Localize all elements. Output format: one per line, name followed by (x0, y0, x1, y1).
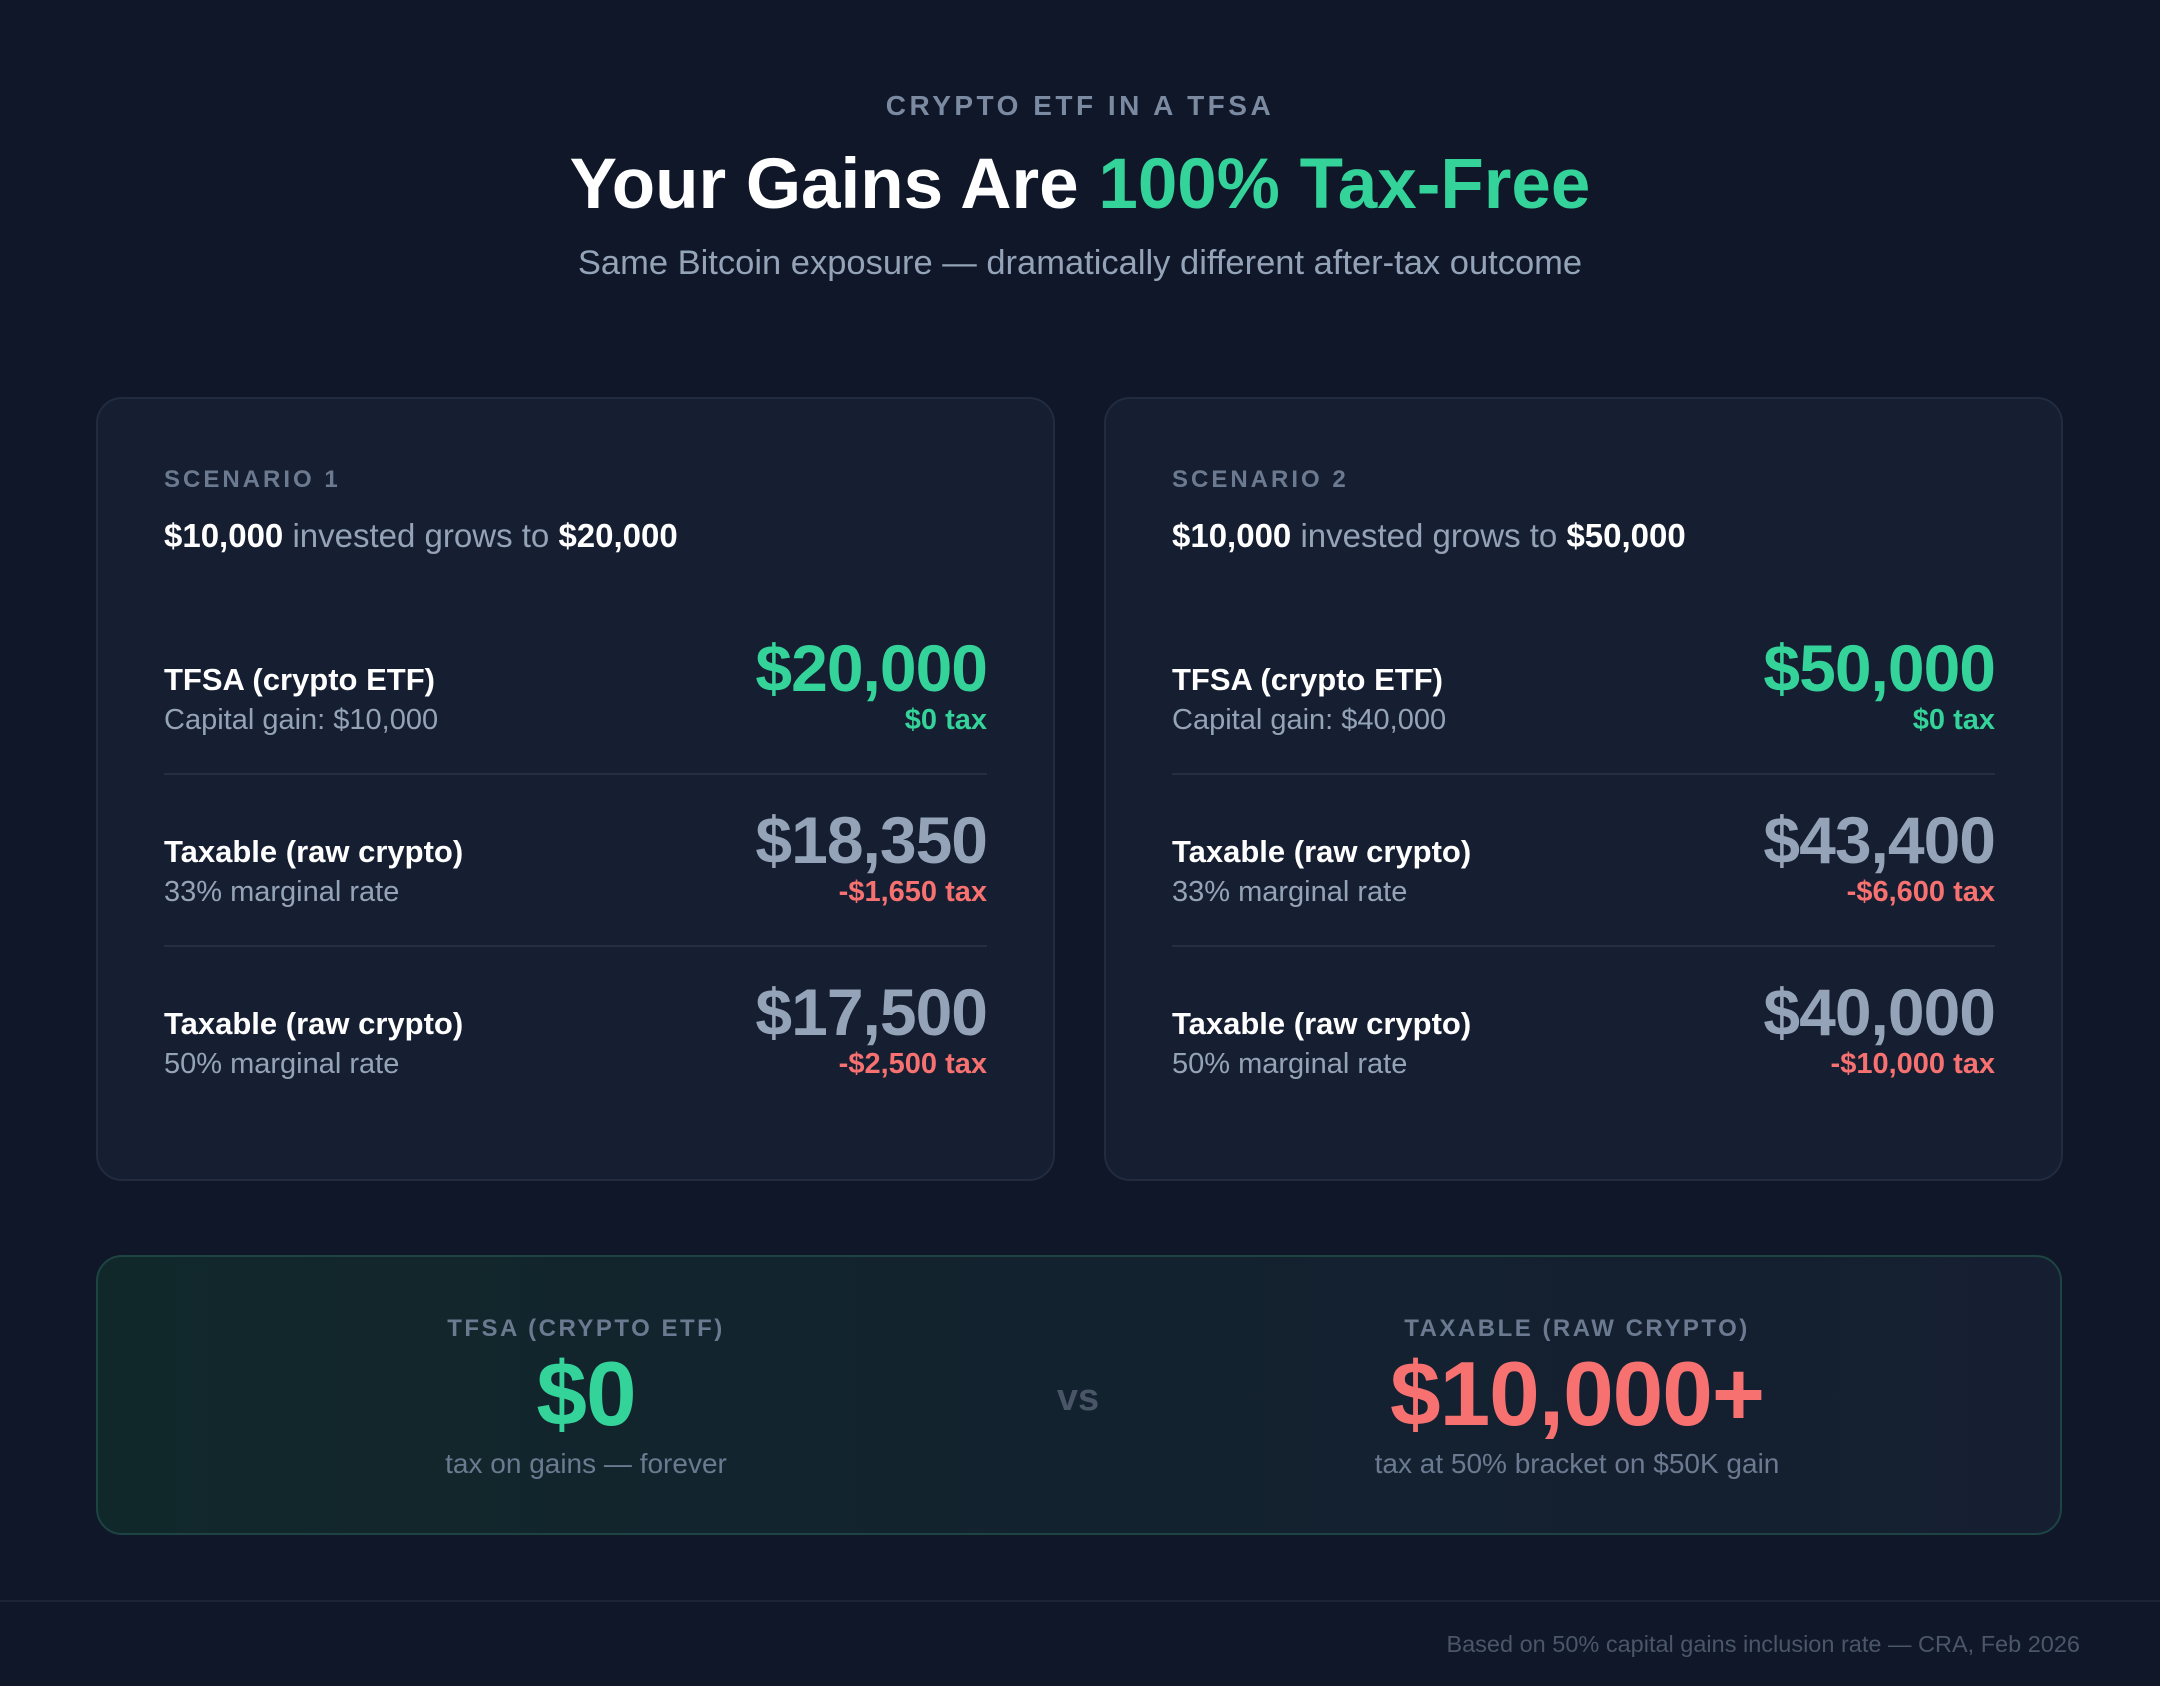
row: taxable 33%: 33% marginal rate (1172, 876, 1407, 908)
kicker: CRYPTO ETF IN A TFSA (886, 90, 1274, 121)
row: TFSA: $20,000 (755, 631, 987, 705)
row: taxable 33% (1172, 803, 1995, 908)
row: taxable 50%: -$2,500 tax (839, 1048, 987, 1080)
row: TFSA: TFSA (crypto ETF) (1172, 662, 1443, 697)
row: taxable 33%: $18,350 (755, 803, 987, 877)
row: taxable 50%: Taxable (raw crypto) (1172, 1006, 1471, 1041)
summary: taxable: tax at 50% bracket on $50K gain (1375, 1448, 1779, 1479)
panel: scenario 2 (1104, 397, 2063, 1181)
scenario description: $10,000 invested grows to $50,000 (1172, 517, 1686, 554)
row: taxable 50%: Taxable (raw crypto) (164, 1006, 463, 1041)
row: taxable 50%: $17,500 (755, 975, 987, 1049)
summary: taxable: $10,000+ (1390, 1344, 1764, 1445)
row: TFSA: $0 tax (905, 704, 987, 736)
scenario label: SCENARIO 2 (1172, 466, 1349, 493)
subtitle: Same Bitcoin exposure — dramatically different after-tax outcome (578, 244, 1582, 282)
summary: TFSA (445, 1315, 727, 1479)
panel: scenario 1 (96, 397, 1055, 1181)
vs label: vs (1057, 1377, 1099, 1419)
summary: taxable (1375, 1315, 1779, 1479)
scenario description: $10,000 invested grows to $20,000 (164, 517, 678, 554)
row: taxable 33%: Taxable (raw crypto) (164, 834, 463, 869)
row: taxable 33%: -$6,600 tax (1847, 876, 1995, 908)
row: TFSA (1172, 631, 1995, 736)
summary: TFSA: $0 (536, 1344, 636, 1445)
row: TFSA: $0 tax (1913, 704, 1995, 736)
summary: TFSA: TFSA (CRYPTO ETF) (447, 1315, 725, 1342)
panel: summary comparison (96, 1255, 2062, 1535)
row: TFSA: Capital gain: $10,000 (164, 704, 438, 736)
scenario label: SCENARIO 1 (164, 466, 341, 493)
row: TFSA (164, 631, 987, 736)
row: TFSA: Capital gain: $40,000 (1172, 704, 1446, 736)
row: taxable 33% (164, 803, 987, 908)
row: taxable 50% (1172, 975, 1995, 1080)
row: taxable 33%: Taxable (raw crypto) (1172, 834, 1471, 869)
row: taxable 33%: -$1,650 tax (839, 876, 987, 908)
summary: taxable: TAXABLE (RAW CRYPTO) (1404, 1315, 1750, 1342)
row: taxable 50%: 50% marginal rate (164, 1048, 399, 1080)
row: taxable 50%: $40,000 (1763, 975, 1995, 1049)
footer note: Based on 50% capital gains inclusion rate — CRA, Feb 2026 (1446, 1631, 2080, 1657)
row: TFSA: $50,000 (1763, 631, 1995, 705)
title: Your Gains Are 100% Tax-Free (570, 145, 1590, 224)
row: taxable 50%: -$10,000 tax (1831, 1048, 1995, 1080)
summary: TFSA: tax on gains — forever (445, 1448, 727, 1479)
row: taxable 33%: 33% marginal rate (164, 876, 399, 908)
row: taxable 50% (164, 975, 987, 1080)
row: TFSA: TFSA (crypto ETF) (164, 662, 435, 697)
row: taxable 33%: $43,400 (1763, 803, 1995, 877)
row: taxable 50%: 50% marginal rate (1172, 1048, 1407, 1080)
